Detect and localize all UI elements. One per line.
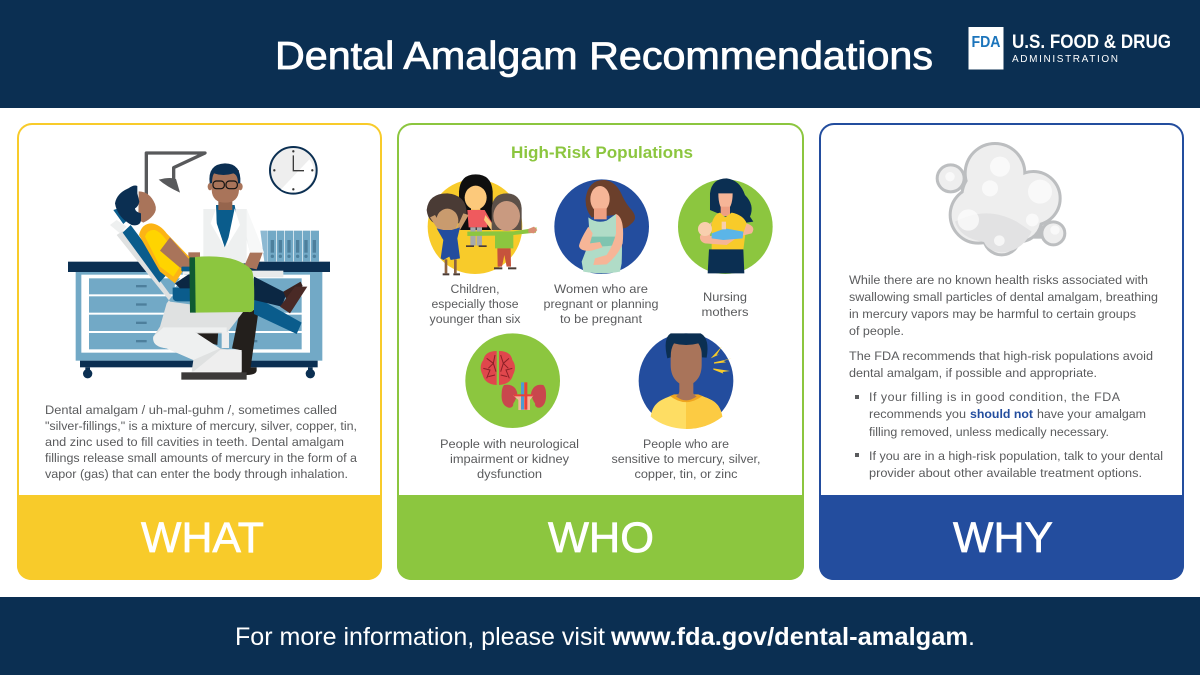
panel: who [397, 124, 804, 580]
captions row two: People who are [643, 437, 729, 451]
clock [270, 147, 317, 194]
bullet list: If you are in a high-risk population, talk to your dental [869, 449, 1163, 463]
heading: High-Risk Populations [511, 144, 693, 162]
explanatory text: The FDA recommends that high-risk populations avoid [849, 349, 1153, 363]
bullet list [855, 390, 1163, 480]
FDA logo: FDA [972, 34, 1001, 51]
band: why [819, 495, 1184, 580]
captions row two: sensitive to mercury, silver, [612, 452, 760, 466]
description text: and zinc used to fill cavities in teeth. Dental amalgam [45, 435, 344, 449]
patient [115, 186, 307, 313]
FDA logo: ADMINISTRATION [1012, 54, 1118, 65]
icons row two [465, 333, 733, 429]
band: why: WHY [953, 514, 1053, 562]
icons row one [427, 174, 773, 275]
captions row one: Nursing [703, 290, 747, 304]
captions row two: impairment or kidney [450, 452, 570, 466]
description text: "silver-fillings," is a mixture of mercury, silver, copper, tin, [45, 419, 357, 433]
description text [45, 403, 357, 481]
footer banner: For more information, please visit [235, 623, 605, 651]
footer banner: . [968, 623, 975, 651]
captions row one: especially those [432, 297, 519, 311]
band: who: WHO [548, 514, 654, 562]
icon: pregnant woman [554, 179, 649, 274]
explanatory text: dental amalgam, if possible and appropriate. [849, 366, 1097, 380]
footer banner [0, 597, 1200, 675]
title: Dental Amalgam Recommendations [275, 35, 933, 78]
icon: brain and kidneys [465, 333, 560, 428]
captions row one: younger than six [430, 312, 521, 326]
explanatory text [849, 273, 1158, 380]
captions row one: mothers [702, 305, 748, 319]
captions row one [430, 282, 748, 326]
captions row one: Women who are [554, 282, 648, 296]
captions row one: to be pregnant [560, 312, 643, 326]
captions row two: dysfunction [477, 467, 542, 481]
dental chair [110, 208, 302, 380]
bullet list: have your amalgam [1037, 407, 1146, 421]
description text: vapor (gas) that can enter the body through inhalation. [45, 467, 348, 481]
icon: sensitive person [639, 333, 733, 429]
description text: fillings release small amounts of mercury in the form of a [45, 451, 357, 465]
bullet list: If your filling is in good condition, the FDA [869, 390, 1121, 404]
bullet list: recommends you [869, 407, 966, 421]
explanatory text: While there are no known health risks associated with [849, 273, 1148, 287]
bullet list: provider about other available treatment options. [869, 466, 1142, 480]
header banner [0, 0, 1200, 108]
illustration: dentist and patient [68, 147, 330, 380]
explanatory text: of people. [849, 324, 904, 338]
dentist [188, 163, 264, 375]
captions row two: copper, tin, or zinc [634, 467, 738, 481]
bullet list: filling removed, unless medically necessary. [869, 425, 1109, 439]
icon: vapor cloud [939, 145, 1063, 253]
FDA logo [968, 27, 1171, 70]
binders [260, 231, 319, 262]
panel: why [819, 124, 1184, 580]
panel: what [17, 124, 382, 580]
band: what [17, 495, 382, 580]
icon: nursing mother [678, 178, 773, 274]
explanatory text: swallowing small particles of dental amalgam, breathing [849, 290, 1158, 304]
band: who [397, 495, 804, 580]
band: what: WHAT [141, 514, 264, 562]
captions row two: People with neurological [440, 437, 579, 451]
FDA logo: U.S. FOOD & DRUG [1012, 32, 1171, 53]
captions row one: pregnant or planning [544, 297, 659, 311]
captions row two [440, 437, 760, 481]
dental lamp [146, 153, 205, 195]
captions row one: Children, [450, 282, 500, 296]
icon: children [427, 174, 537, 275]
explanatory text: in mercury vapors may be harmful to certain groups [849, 307, 1136, 321]
footer banner: www.fda.gov/dental-amalgam [610, 623, 968, 651]
bullet list: should not [970, 407, 1033, 421]
description text: Dental amalgam / uh-mal-guhm /, sometimes called [45, 403, 337, 417]
